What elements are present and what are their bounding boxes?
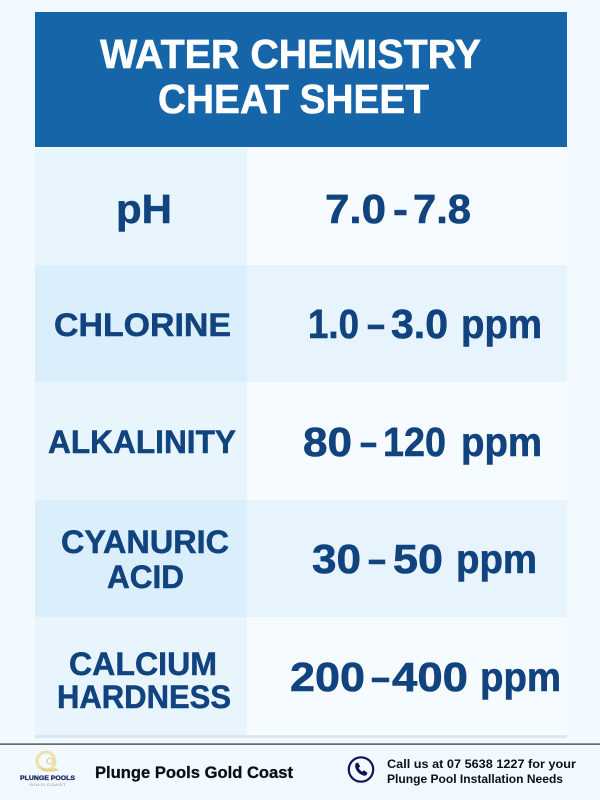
title: WATER CHEMISTRY bbox=[100, 31, 481, 77]
row: calcium hardness: – bbox=[371, 654, 390, 700]
row: chlorine: – bbox=[367, 301, 385, 347]
row: cyanuric acid: 30 bbox=[312, 536, 361, 582]
header banner bbox=[35, 12, 567, 147]
title bbox=[100, 31, 481, 122]
contact text bbox=[387, 757, 576, 786]
row: pH: pH bbox=[116, 186, 172, 232]
row: alkalinity: 120 bbox=[383, 419, 446, 465]
footer bbox=[20, 752, 576, 787]
row: calcium hardness: CALCIUM bbox=[69, 646, 217, 682]
contact text: Call us at 07 5638 1227 for your bbox=[387, 757, 576, 771]
row: chlorine: 1.0 bbox=[308, 301, 359, 347]
row: cyanuric acid: CYANURIC bbox=[61, 524, 229, 560]
row: cyanuric acid: ACID bbox=[107, 559, 184, 595]
row: cyanuric acid bbox=[35, 500, 567, 617]
row: calcium hardness: ppm bbox=[480, 654, 561, 700]
row: cyanuric acid: 50 bbox=[393, 536, 443, 582]
icon: company logo: PLUNGE POOLS bbox=[20, 775, 76, 782]
row: chlorine bbox=[35, 265, 567, 382]
row: calcium hardness: 400 bbox=[392, 654, 468, 700]
icon: phone bbox=[349, 757, 373, 782]
row: alkalinity: ppm bbox=[461, 419, 542, 465]
row: pH: - bbox=[393, 186, 408, 232]
row: calcium hardness bbox=[35, 617, 567, 735]
row: calcium hardness: HARDNESS bbox=[57, 679, 231, 715]
row: alkalinity: 80 bbox=[303, 419, 352, 465]
row: alkalinity bbox=[35, 382, 567, 500]
icon: company logo: GOLD COAST bbox=[29, 783, 67, 787]
row: chlorine: CHLORINE bbox=[54, 307, 231, 343]
icon: company logo bbox=[20, 752, 76, 787]
row: cyanuric acid: ppm bbox=[456, 536, 537, 582]
row: alkalinity: ALKALINITY bbox=[48, 424, 236, 460]
contact text: Plunge Pool Installation Needs bbox=[387, 772, 563, 786]
row: alkalinity: – bbox=[360, 419, 377, 465]
row: pH: 7.0 bbox=[325, 186, 386, 232]
row: calcium hardness: 200 bbox=[290, 654, 365, 700]
row: chlorine: ppm bbox=[461, 301, 542, 347]
company name: Plunge Pools Gold Coast bbox=[95, 763, 293, 782]
title: CHEAT SHEET bbox=[158, 76, 429, 122]
row: chlorine: 3.0 bbox=[391, 301, 448, 347]
row: pH bbox=[35, 148, 567, 265]
row: pH: 7.8 bbox=[413, 186, 471, 232]
row: cyanuric acid: – bbox=[368, 536, 386, 582]
